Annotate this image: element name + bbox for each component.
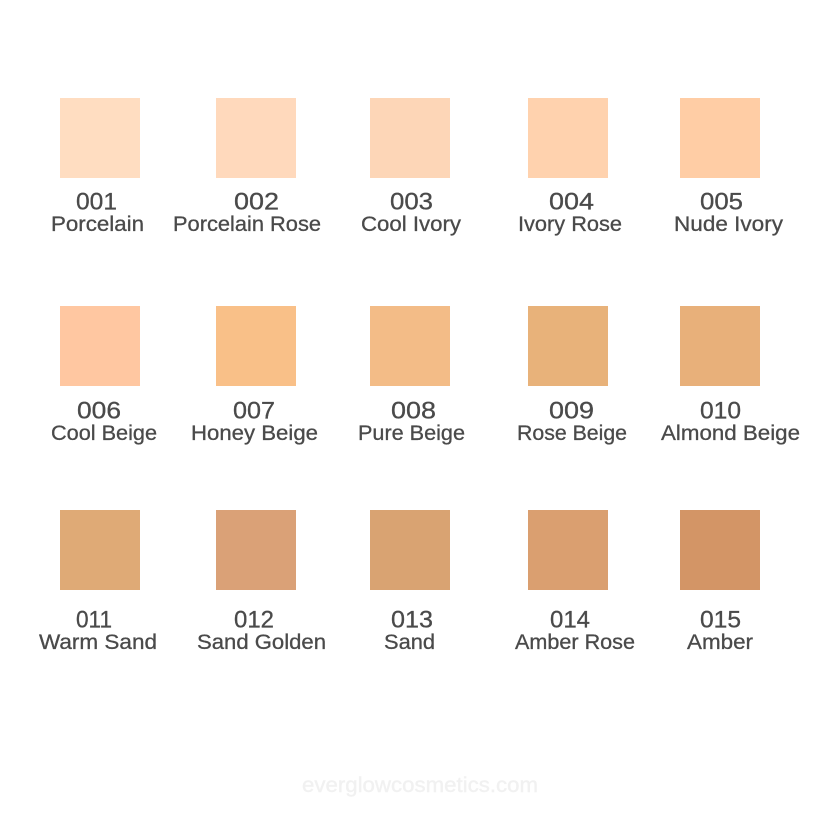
shade 015: 015 bbox=[700, 606, 741, 634]
shade 003: Cool Ivory bbox=[361, 212, 461, 236]
shade 003 bbox=[361, 98, 461, 236]
shade 011: 011 bbox=[76, 606, 112, 634]
shade 013 bbox=[370, 510, 450, 654]
shade 002: Porcelain Rose bbox=[173, 212, 321, 236]
shade 008: Pure Beige bbox=[358, 421, 465, 445]
shade 005 bbox=[674, 98, 783, 236]
shade 001 bbox=[51, 98, 144, 236]
shade 006: Cool Beige bbox=[51, 421, 157, 445]
shade 006 bbox=[51, 306, 157, 445]
shade 010 bbox=[661, 306, 800, 445]
shade 004 bbox=[518, 98, 622, 236]
shade 002: 002 bbox=[234, 188, 279, 216]
shade 013: 013 bbox=[391, 606, 433, 634]
shade 002 bbox=[173, 98, 321, 236]
shade 009 bbox=[517, 306, 627, 445]
shade 004: 004 bbox=[549, 188, 594, 216]
shade 001: Porcelain bbox=[51, 212, 144, 236]
shade 010: 010 bbox=[700, 398, 741, 424]
shade 010: Almond Beige bbox=[661, 421, 800, 445]
shade 015: Amber bbox=[687, 630, 753, 654]
shade 001: 001 bbox=[76, 188, 117, 216]
shade 011 bbox=[39, 510, 157, 654]
shade 007 bbox=[191, 306, 318, 445]
shade 014: Amber Rose bbox=[515, 630, 635, 654]
shade 013: Sand bbox=[384, 630, 435, 654]
shade 015 bbox=[680, 510, 760, 654]
shade 004: Ivory Rose bbox=[518, 212, 622, 236]
shade 005: Nude Ivory bbox=[674, 212, 783, 236]
shade 012: 012 bbox=[234, 606, 274, 634]
website watermark: everglowcosmetics.com bbox=[302, 774, 538, 797]
shade 009: 009 bbox=[549, 398, 594, 424]
shade 007: 007 bbox=[233, 398, 275, 424]
shade 007: Honey Beige bbox=[191, 421, 318, 445]
shade 011: Warm Sand bbox=[39, 630, 157, 654]
shade 014: 014 bbox=[550, 606, 590, 634]
shade 014 bbox=[515, 510, 635, 654]
shade 008 bbox=[358, 306, 465, 445]
shade 012 bbox=[197, 510, 326, 654]
shade 003: 003 bbox=[390, 188, 433, 216]
shade 006: 006 bbox=[77, 398, 121, 424]
shade 012: Sand Golden bbox=[197, 630, 326, 654]
shade 008: 008 bbox=[391, 398, 436, 424]
shade 009: Rose Beige bbox=[517, 421, 627, 445]
shade 005: 005 bbox=[700, 188, 743, 216]
